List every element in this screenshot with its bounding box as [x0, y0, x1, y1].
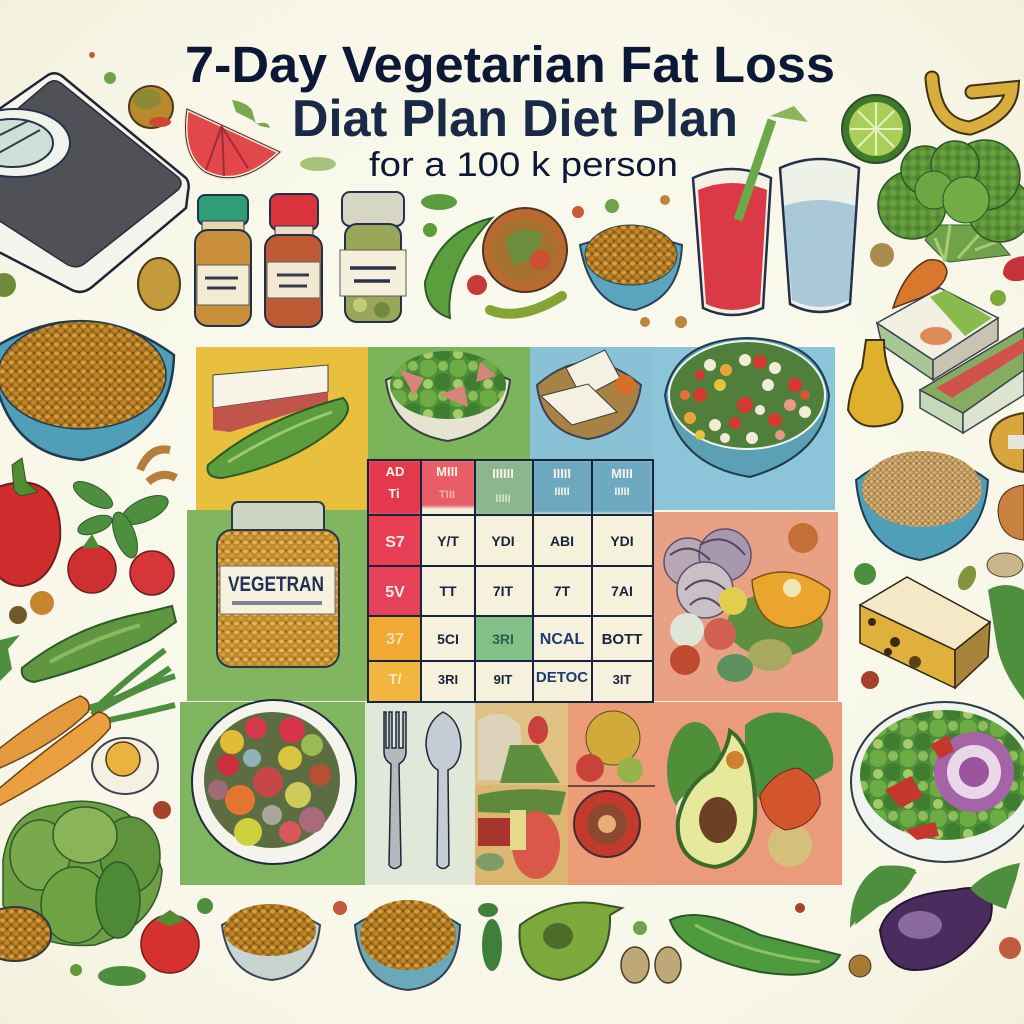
table: weekly grid [368, 460, 653, 702]
icon: herb sprig top [232, 100, 336, 171]
panel: red avocado [655, 702, 842, 885]
icon: food box with salmon [920, 328, 1024, 433]
icon: spoon [426, 712, 461, 868]
icon: spoon of grain [0, 907, 51, 961]
icon: tomatoes [68, 534, 174, 595]
icon: lime half [842, 95, 910, 163]
panel: green plate [180, 700, 365, 885]
panel: yellow tofu and cucumber [196, 347, 368, 510]
panel: blue tofu bowl [530, 347, 653, 460]
header labels: AD [386, 464, 404, 479]
cell labels: 3IT [613, 672, 631, 687]
cell labels: 7IT [493, 583, 514, 599]
header labels: IIIII [553, 466, 571, 481]
icon: measuring tape [932, 78, 1012, 128]
icon: lentil bowl top [580, 225, 682, 310]
header labels [386, 464, 633, 505]
icon: walnuts [621, 947, 681, 983]
jar label: VEGETRAN [228, 573, 324, 596]
header labels: MIII [611, 466, 633, 481]
row labels [368, 515, 533, 702]
icon: cucumber left [22, 606, 176, 682]
cell labels: 7T [554, 583, 571, 599]
grid lines [368, 460, 653, 702]
title line 2: Diat Plan Diet Plan [292, 90, 738, 148]
cell labels: DETOC [536, 669, 588, 686]
header labels: IIIII [495, 493, 511, 505]
icon: large lentil bowl [0, 321, 174, 460]
cell labels: BOTT [602, 631, 642, 648]
cell labels: YDI [610, 533, 634, 549]
cell labels: 9IT [494, 672, 512, 687]
icon: cheese block [860, 577, 990, 688]
cell labels: S7 [385, 534, 405, 551]
icon: grain bowl right [856, 451, 988, 560]
icon: spice jar red lid [265, 194, 322, 327]
icon: boiled egg [92, 738, 158, 794]
cell labels: 5CI [437, 631, 459, 647]
title [185, 36, 835, 184]
panel: blue mixed salad bowl [653, 338, 835, 510]
panel: green salad [368, 347, 530, 460]
panel: tan food squares [475, 702, 568, 885]
cell labels [385, 533, 642, 688]
cell labels: 3RI [492, 631, 514, 647]
icon: salad plate right [851, 702, 1024, 862]
icon: right edge greens [854, 553, 1024, 700]
icon: fork [384, 712, 406, 868]
icon: nut bowl bottom [222, 904, 320, 980]
cell labels: 37 [386, 631, 404, 648]
cell labels: T/ [388, 671, 402, 688]
icon: pea pod [421, 194, 492, 318]
icon: pickle jar [340, 192, 406, 322]
cell labels: NCAL [540, 631, 584, 648]
header labels: IIIII [614, 486, 630, 498]
icon: food box with greens [877, 288, 998, 380]
cell labels: 3RI [438, 672, 458, 687]
icon: bowl of roasted vegetables [483, 208, 567, 314]
icon: melon slice [185, 109, 280, 178]
icon: avocado bottom [520, 902, 622, 980]
cell labels: TT [439, 583, 457, 599]
icon: small nuts and snack left [0, 258, 180, 681]
icon: leaf right bottom [849, 866, 1021, 977]
cell labels: YDI [491, 533, 515, 549]
panel: pale cutlery [365, 702, 475, 885]
icon: small orange fruit [129, 86, 173, 128]
subtitle: for a 100 k person [369, 146, 678, 184]
header row cells [368, 460, 653, 515]
icon: bean bowl bottom [355, 900, 460, 990]
title line 1: 7-Day Vegetarian Fat Loss [185, 36, 835, 93]
cell labels: 7AI [611, 583, 633, 599]
icon: carrots [0, 650, 175, 808]
header labels: MIII [436, 464, 458, 479]
panel: salmon food squares [568, 702, 655, 885]
icon: pear [848, 340, 902, 426]
icon: red bell pepper [0, 458, 60, 586]
icon: tomato bottom [98, 910, 199, 986]
header labels: IIIII [554, 486, 570, 498]
header labels: Ti [388, 486, 400, 501]
header labels: IIIIII [492, 466, 514, 481]
icon: glass of water [780, 159, 859, 312]
icon: cucumber bottom [670, 915, 840, 975]
cell labels: ABI [550, 533, 574, 549]
panel: salmon vegetables [653, 512, 838, 701]
panel: meal plan board [180, 338, 842, 885]
icon: eggplant [855, 863, 1020, 970]
icon: basil leaves [69, 476, 172, 561]
icon: sprig bottom [478, 903, 502, 971]
icon: glass of juice [693, 106, 808, 315]
header labels: TIII [439, 489, 455, 501]
icon: lettuce head [3, 801, 162, 946]
icon: golden ring and orange item right [990, 413, 1024, 540]
cell labels: Y/T [437, 533, 459, 549]
panel: green with lentil jar [187, 502, 368, 701]
icon: bathroom scale [0, 73, 189, 292]
cell labels: 5V [385, 584, 405, 601]
icon: spice jar green lid [195, 195, 251, 326]
icon: broccoli and carrot [878, 140, 1024, 308]
